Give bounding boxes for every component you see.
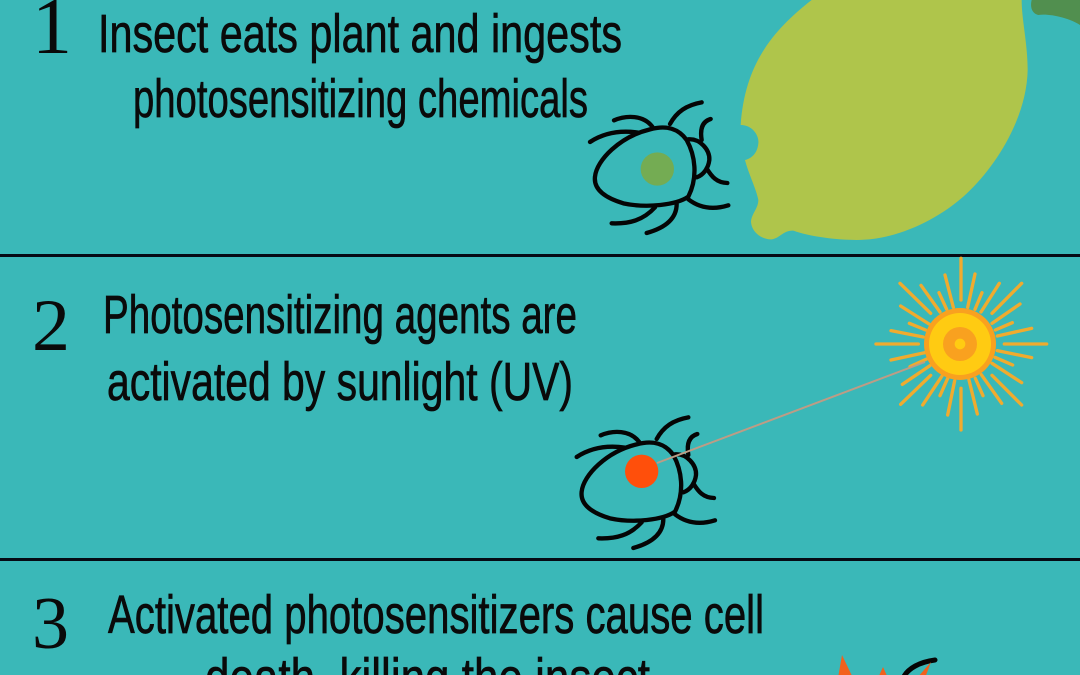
panel: step 3	[32, 583, 935, 675]
icon: insect with ingested chemical	[590, 102, 728, 233]
step 3 text: Activated photosensitizers cause cell	[108, 585, 764, 645]
panel: step 1	[32, 0, 1080, 240]
icon: dying insect with burst	[838, 655, 935, 675]
icon: sun	[876, 258, 1047, 430]
step 3 text	[108, 585, 764, 675]
panel: step 2	[32, 258, 1047, 548]
step 2 text	[103, 285, 577, 412]
icon: leaf	[741, 0, 1080, 240]
icon: insect with activated agent	[577, 417, 715, 548]
step 1 text: photosensitizing chemicals	[133, 69, 588, 129]
step 1 text	[98, 4, 622, 129]
step 1 text: Insect eats plant and ingests	[98, 4, 622, 64]
arrow: sunlight ray to insect	[657, 362, 925, 463]
step 2 text: activated by sunlight (UV)	[107, 352, 573, 412]
step number 3: 3	[32, 583, 69, 665]
step number 2: 2	[32, 285, 70, 367]
step 2 text: Photosensitizing agents are	[103, 285, 577, 345]
